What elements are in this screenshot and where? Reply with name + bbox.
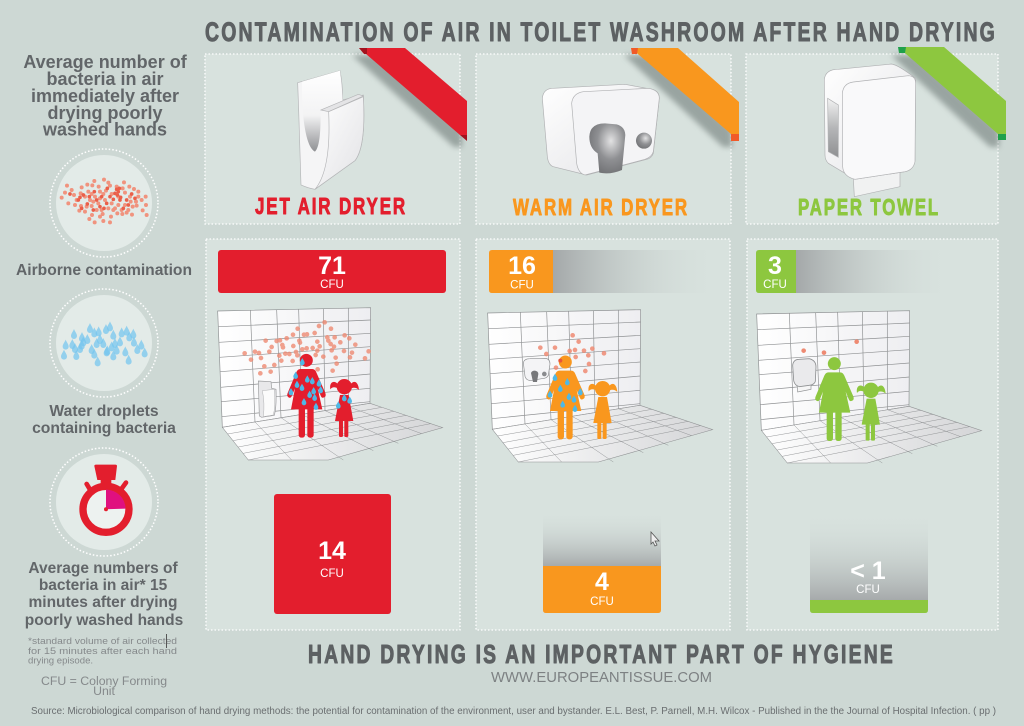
bar: 16 CFU — [489, 250, 723, 293]
label: water droplets: Water droplets — [49, 403, 159, 420]
ribbon: orange — [624, 48, 739, 147]
panel: paper towel — [746, 47, 1006, 224]
heading: 15 minutes after drying: bacteria in air* 15 — [39, 577, 168, 594]
bar: 3 CFU — [756, 250, 956, 293]
icon: stopwatch — [50, 448, 158, 556]
cursor line — [166, 634, 167, 648]
box: 14 CFU: CFU — [320, 568, 344, 580]
box: less than 1 CFU — [810, 510, 928, 613]
ribbon: red — [352, 48, 467, 147]
bar: 16 CFU: CFU — [510, 280, 534, 292]
scene: washroom with warm dryer — [488, 310, 713, 462]
bar: 3 CFU: CFU — [763, 279, 787, 291]
heading: 15 minutes after drying: Average numbers of — [28, 560, 178, 577]
left column — [16, 52, 192, 698]
box: 4 CFU: CFU — [590, 596, 614, 608]
heading: immediately after drying: immediately after — [31, 86, 179, 106]
label: water droplets: containing bacteria — [32, 420, 176, 437]
scene: washroom with jet dryer — [218, 308, 443, 460]
bar: 71 CFU: 71 — [318, 252, 346, 280]
box: less than 1 CFU: CFU — [856, 584, 880, 596]
ribbon: green — [891, 47, 1006, 147]
box: 4 CFU — [543, 510, 661, 613]
bar: 3 CFU: 3 — [768, 252, 782, 280]
panel: warm results — [476, 239, 730, 630]
panel: jet air dryer — [205, 48, 467, 224]
CFU definition: CFU = Colony Forming — [41, 674, 167, 688]
scene: washroom with towel dispenser — [757, 311, 982, 463]
footnote: for 15 minutes after each hand — [28, 646, 177, 657]
heading: immediately after drying: drying poorly — [47, 103, 163, 123]
icon: towel dispenser — [824, 64, 916, 197]
icon: warm dryer — [542, 84, 659, 175]
icon: water droplets — [50, 289, 158, 397]
box: 4 CFU: 4 — [595, 568, 609, 596]
icon: mouse pointer — [651, 532, 659, 546]
bar: 16 CFU: 16 — [508, 252, 536, 280]
icon: airborne contamination — [50, 149, 158, 257]
website: WWW.EUROPEANTISSUE.COM — [491, 670, 712, 686]
heading: 15 minutes after drying: poorly washed hands — [25, 612, 183, 629]
box: 14 CFU — [274, 494, 391, 614]
heading: immediately after drying: bacteria in air — [46, 69, 164, 89]
label: JET AIR DRYER — [255, 193, 407, 219]
bar: 71 CFU: CFU — [320, 279, 344, 291]
label: airborne contamination: Airborne contamination — [16, 262, 192, 279]
panel: warm air dryer — [476, 48, 739, 224]
panel: paper towel results — [747, 239, 998, 630]
panel: jet results — [206, 239, 460, 630]
label: PAPER TOWEL — [798, 194, 940, 220]
bar: 71 CFU — [218, 250, 446, 293]
heading: immediately after drying: washed hands — [42, 120, 167, 140]
source line: Source: Microbiological comparison of hand drying methods: the potential for contamination of the environment, user and bystander. E.L. Best, P. Parnell, M.H. Wilcox - Published in the the Journal of Hospital Infection. ( pp ) — [31, 706, 996, 717]
CFU definition: Unit — [93, 684, 116, 698]
box: 14 CFU: 14 — [318, 537, 346, 565]
label: WARM AIR DRYER — [513, 194, 689, 220]
footnote: *standard volume of air collected — [28, 636, 177, 647]
box: less than 1 CFU: < 1 — [850, 557, 886, 585]
footnote: drying episode. — [28, 656, 93, 666]
heading: immediately after drying: Average number of — [23, 52, 188, 72]
heading: 15 minutes after drying: minutes after drying — [28, 594, 178, 611]
icon: jet dryer — [298, 71, 364, 189]
footnote — [28, 636, 177, 666]
